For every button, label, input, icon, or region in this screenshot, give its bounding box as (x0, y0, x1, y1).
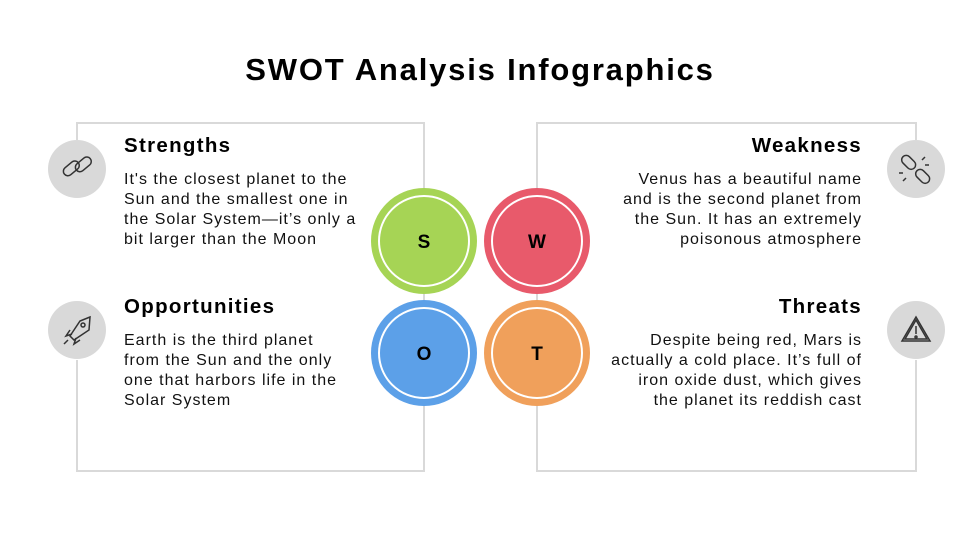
text: threats: actually a cold place. It’s full of (611, 352, 862, 369)
circle S (371, 188, 477, 294)
circle T (484, 300, 590, 406)
text: strengths: bit larger than the Moon (124, 231, 317, 248)
text: weakness: the Sun. It has an extremely (635, 211, 862, 228)
circle W: W (528, 232, 546, 253)
icon: rocket (48, 301, 106, 359)
heading: weakness: Weakness (752, 134, 862, 157)
text: threats: iron oxide dust, which gives (638, 372, 862, 389)
text: opportunities: Earth is the third planet (124, 332, 314, 349)
title: SWOT Analysis Infographics (245, 52, 715, 87)
text: opportunities: Solar System (124, 392, 231, 409)
icon: link (48, 140, 106, 198)
text: weakness: poisonous atmosphere (680, 231, 862, 248)
text: strengths (124, 171, 356, 248)
heading: opportunities: Opportunities (124, 295, 275, 318)
heading: threats: Threats (779, 295, 862, 318)
text: weakness (623, 171, 862, 248)
heading: strengths: Strengths (124, 134, 231, 157)
circle S: S (418, 232, 430, 253)
text: weakness: Venus has a beautiful name (639, 171, 862, 188)
circle W (484, 188, 590, 294)
text: threats: Despite being red, Mars is (650, 332, 862, 349)
icon: warning (887, 301, 945, 359)
text: weakness: and is the second planet from (623, 191, 862, 208)
circle O (371, 300, 477, 406)
text: strengths: It's the closest planet to the (124, 171, 347, 188)
circle T: T (531, 344, 543, 365)
icon: broken link (887, 140, 945, 198)
text: threats: the planet its reddish cast (654, 392, 862, 409)
circle O: O (417, 344, 431, 365)
text: opportunities: from the Sun and the only (124, 352, 332, 369)
text: strengths: the Solar System—it’s only a (124, 211, 356, 228)
text: opportunities (124, 332, 337, 409)
text: threats (611, 332, 862, 409)
text: opportunities: one that harbors life in the (124, 372, 337, 389)
text: strengths: Sun and the smallest one in (124, 191, 348, 208)
